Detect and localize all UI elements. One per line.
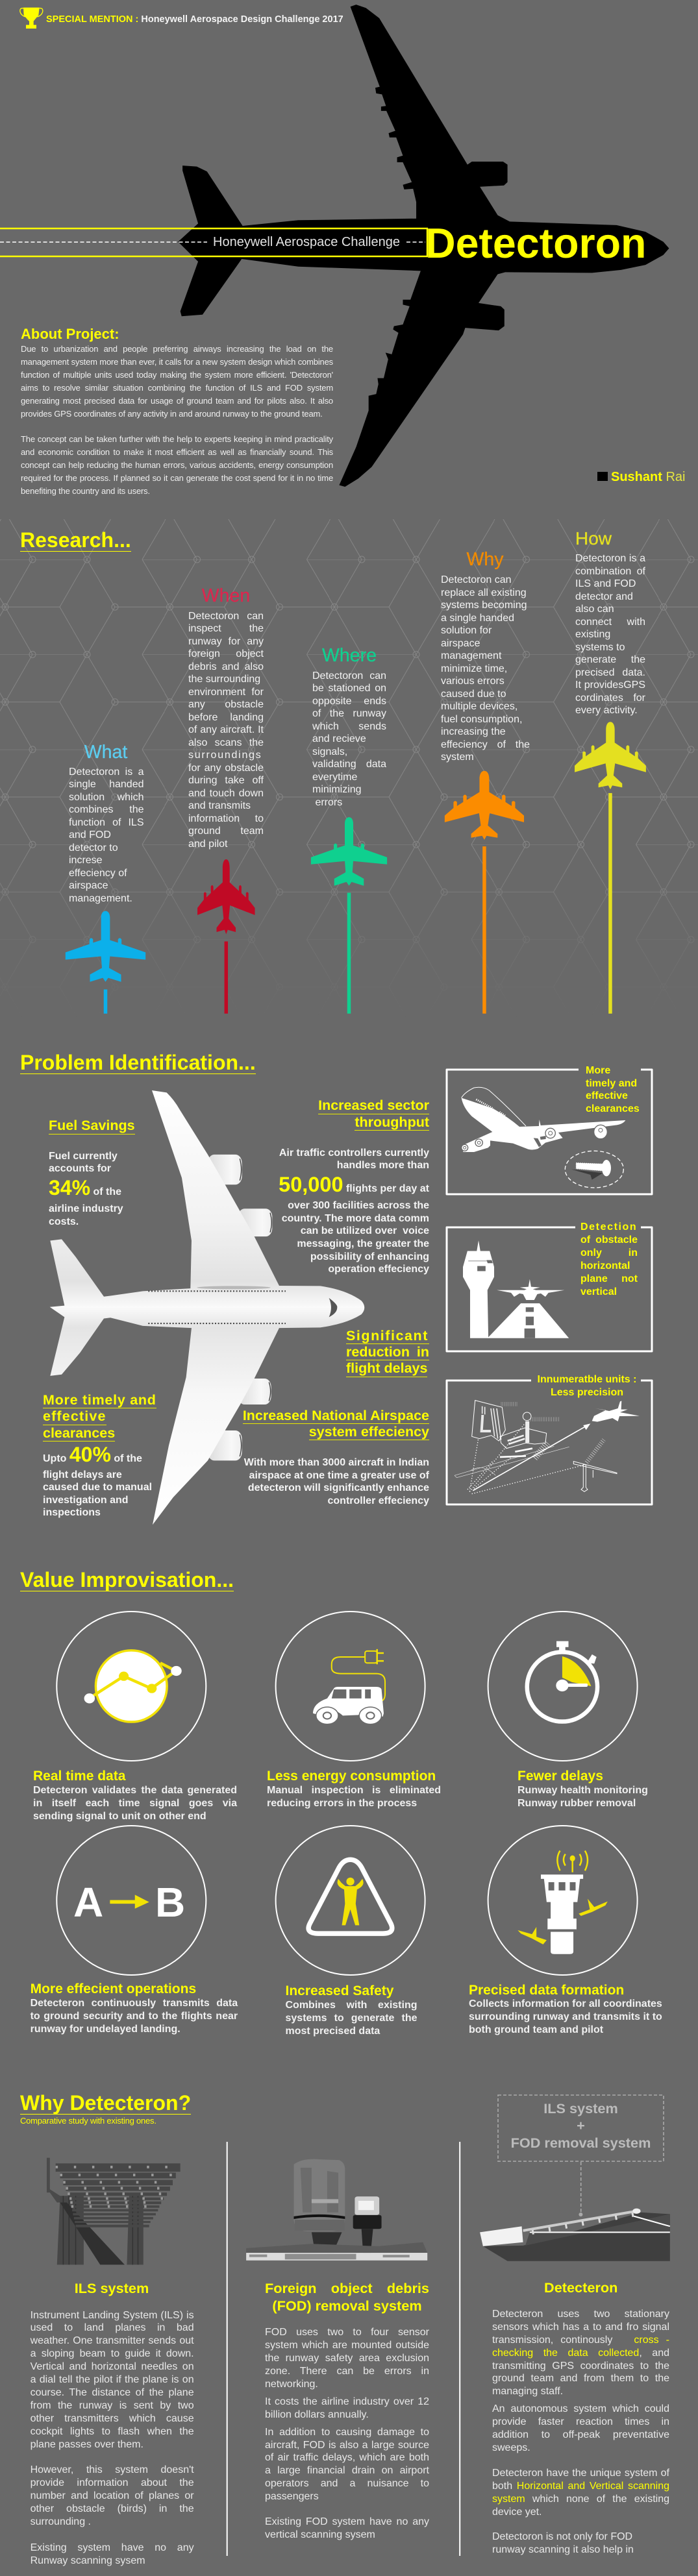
text: how: existing [575,629,610,640]
icon: line chart [84,1650,182,1722]
text: increased safety: Combines with existing [286,2000,417,2011]
text: when: runway for any [188,636,264,647]
text: fewer delays: Runway health monitoring [517,1785,648,1796]
text: Detecteron autonomy: sweeps. [492,2442,530,2453]
icon: blue plane with runway [66,911,145,1014]
text: what [69,766,144,903]
text: when: also scans the [188,737,264,748]
heading: why: Why [466,549,504,570]
text: Detecteron unique system: Detecteron have the unique system of [492,2468,669,2479]
label: clearances box: clearances [586,1103,640,1114]
text: increased safety: most precised data [286,2026,380,2037]
text: ILS system: Runway scanning sysem [31,2555,145,2566]
text: when: of any aircraft. It [188,724,264,735]
text: FOD description: zone. There can be errors in [265,2366,429,2377]
text: when: Detectoron can [188,611,264,622]
text: Detecteron unique system: system which none of the existing [492,2494,669,2505]
text: flight delays: Upto 40% of the [43,1443,142,1466]
heading: fewer delays: Fewer delays [517,1769,603,1784]
text: ILS system: other transmitters which cause [31,2413,194,2424]
divider left [227,2142,228,2556]
text: how: systems to [575,641,625,653]
text: when: and transmits [188,800,251,811]
heading: national airspace: Increased National Airspace [243,1408,429,1423]
text: how: It providesGPS [575,680,645,691]
text: Detecteron unique system: both Horizontal and Vertical scanning [492,2481,669,2492]
text: ILS system: surrounding . [31,2516,91,2527]
heading: fuel savings: Fuel Savings [49,1118,135,1133]
text: Detecteron autonomy [492,2403,669,2453]
circle: data formation [488,1826,638,1975]
author name: Sushant Rai [611,470,685,484]
text: when [188,611,264,850]
heading: about project: About Project: [21,326,119,342]
text: FOD description: the runway safety area exclusion [265,2353,429,2364]
text: what: solution which [69,792,144,802]
text: Detecteron sensors: transmitting GPS coordinates to the [492,2361,669,2372]
text: when: for any obstacle [188,763,264,774]
title: Detectoron [425,220,646,267]
text: sector throughput: can be utilized over voice [301,1225,429,1236]
heading: more timely clearances [43,1392,156,1441]
heading: FOD system: (FOD) removal system [272,2298,422,2313]
text: less energy: Manual inspection is eliminated [267,1785,441,1796]
text: about project: The concept can be taken further with the help to experts keeping in mind practicality [21,434,333,444]
text: efficient operations: to ground security and to the flights near [31,2011,238,2022]
heading: significant reduction: reduction in [346,1344,429,1360]
text: why: caused due to [441,689,506,700]
text: where: be stationed on [312,683,386,694]
heading: less energy: Less energy consumption [267,1769,436,1784]
box: clearances frame [447,1070,652,1194]
text: FOD limitation [265,2516,429,2540]
text: how: precised data. [575,667,645,678]
text: where: opposite ends [312,696,386,707]
subtitle: Comparative study with existing ones. [20,2116,156,2126]
text: FOD description: system which are mounted outside [265,2340,429,2351]
label: innumerable units box: Less precision [551,1387,623,1398]
text: where: and recieve [312,733,366,744]
box: detection frame [447,1227,652,1351]
text: where [312,670,387,808]
text: FOD damage: of air traffic delays, which are both [265,2452,429,2463]
text: how: combination of [575,566,645,576]
text: how: cordinates for [575,692,645,704]
text: sector throughput: 50,000 flights per day at [279,1173,429,1196]
text: fuel savings: Fuel currently [49,1151,118,1162]
text: where: signals, [312,746,347,757]
text: how: also can [575,604,614,615]
circle: safety [276,1826,425,1975]
text: fuel savings: 34% of the [49,1176,121,1199]
text: what: effeciency of [69,867,127,879]
text: when: environment for [188,687,264,698]
text: ILS system: other obstacle (birds) in the [31,2503,194,2514]
icon label: A: A [73,1879,103,1926]
text: sector throughput: Air traffic controllers currently [279,1147,429,1159]
text: Detecteron sensors: checking the data collected, and [492,2348,669,2359]
text: flight delays [43,1443,152,1518]
text: efficient operations [30,1998,238,2035]
text: FOD cost: billion dollars annually. [265,2409,369,2420]
text: flight delays: investigation and [43,1495,129,1506]
subtitle on runway: Honeywell Aerospace Challenge [213,235,400,249]
illustration: Detecteron runway unit [480,2209,670,2261]
text: sector throughput: operation effeciency [328,1264,429,1275]
text: Detecteron sensors: Detecteron uses two stationary [492,2309,669,2320]
text: where: of the runway [312,708,386,719]
label: combined systems [511,2100,651,2151]
text: what: detector to [69,842,118,853]
text: FOD damage: operators and a nuisance to [265,2478,429,2489]
text: fuel savings: accounts for [49,1163,111,1174]
text: FOD description [265,2327,429,2390]
label: clearances box [586,1065,640,1114]
text: real time data: Detecteron validates the data generated [33,1785,237,1796]
text: what: airspace [69,880,108,891]
illustration: FOD sensors [246,2159,427,2261]
award line: SPECIAL MENTION : Honeywell Aerospace Design Challenge 2017 [46,14,343,25]
text: what: increse [69,855,103,866]
text: national airspace: detecteron will significantly enhance [248,1482,429,1493]
text: fuel savings: airline industry [49,1203,123,1214]
text: why: replace all existing [441,587,527,598]
icon: black airplane silhouette [178,5,669,487]
heading: where: Where [322,645,377,666]
text: when: foreign object [188,648,264,659]
heading: why detecteron: Why Detecteron? [20,2091,191,2115]
text: how [575,553,645,716]
text: why: solution for [441,625,492,636]
label: innumerable units box [538,1374,636,1398]
text: how: connect with [575,617,645,627]
label: clearances box: effective [586,1090,628,1101]
heading: significant reduction: flight delays [346,1360,427,1376]
text: sector throughput: messaging, the greater the [297,1238,429,1249]
heading: when: When [202,585,250,606]
heading: more timely clearances: More timely and [43,1392,156,1408]
panel: why detecteron [20,2091,670,2566]
heading: efficient operations: More effecient operations [31,1981,196,1996]
text: when: and touch down [188,788,264,799]
text: FOD limitation: Existing FOD system have no any [265,2516,429,2527]
text: where: errors [315,797,342,808]
icon: red plane with runway [197,859,255,1014]
text: sector throughput: country. The more data comm [282,1213,429,1224]
text: ILS system: provide information about the [31,2477,194,2488]
circle: less energy [276,1612,425,1761]
text: about project: benefiting the country and its users. [21,486,150,496]
text: where: validating data [312,759,386,770]
text: Detecteron sensors [492,2309,669,2397]
text: flight delays: inspections [43,1507,101,1518]
text: about project: concept can help reducing the human errors, various accidents, energy consumption [21,460,333,470]
text: precised data: surrounding runway and transmits it to [469,2011,662,2022]
text: about project: and economic condition to make it most efficient as well as financially sound. This [21,447,333,457]
icon: arrow A to B [110,1895,149,1909]
text: FOD damage: passengers [265,2491,319,2502]
icon: orange plane with runway [445,771,524,1014]
illustration: ILS approach lights [47,2158,181,2264]
text: ILS system: a dial tell the pilot if the plane is on [31,2374,194,2385]
label: detection box [580,1221,638,1297]
divider right [459,2142,460,2556]
text: increased safety: systems to generate the [286,2013,417,2024]
text: flight delays: caused due to manual [43,1482,152,1493]
text: ILS system: Instrument Landing System (ILS) is [31,2309,194,2321]
text: sector throughput: over 300 facilities across the [288,1200,429,1211]
heading: more timely clearances: effective [43,1408,106,1424]
text: precised data: both ground team and pilot [469,2024,603,2035]
label: clearances box: timely and [586,1077,637,1089]
heading: ILS system: ILS system [75,2280,149,2296]
text: why: various errors [441,676,505,687]
text: national airspace [244,1457,429,1506]
label: detection box: plane not [580,1273,638,1284]
text: ILS system: number and location of planes or [31,2490,194,2501]
text: FOD description: networking. [265,2379,318,2390]
text: what: single handed [69,779,144,790]
heading: Detecteron: Detecteron [544,2279,617,2296]
text: FOD description: FOD uses two to four sensor [265,2327,429,2338]
text: ILS system [30,2309,194,2566]
text: why: Detectoron can [441,574,512,585]
text: FOD cost [265,2396,429,2420]
text: real time data: sending signal to unit on other end [33,1811,206,1822]
heading: value improvisation: Value Improvisation... [20,1568,234,1591]
heading: increased safety: Increased Safety [286,1983,393,1998]
heading: more timely clearances: clearances [43,1425,115,1441]
heading: research: Research... [20,528,131,552]
text: Detecteron autonomy: addition to off-peak preventative [492,2429,669,2440]
text: ILS system: However, this system doesn't [31,2464,194,2475]
text: ILS system: weather. One transmitter sends out [31,2335,194,2346]
text: Detecteron unique system [492,2468,669,2518]
text: about project: Due to urbanization and people preferring airways increasing the load on the [21,344,333,354]
text: Detecteron sensors: ground team and from them to the [492,2373,669,2384]
text: about project: provides GPS coordinates of any activity in and around runway to the ground team. [21,409,323,419]
text: efficient operations: Detecteron continuously transmits data [31,1998,238,2009]
text: about project: function of multiple units used today making the system more efficient. 'Detectoron' [21,370,333,380]
heading: increased sector throughput: Increased sector [318,1098,429,1113]
illustration: airport systems network [455,1401,640,1494]
runway lines [0,228,427,256]
text: ILS system: plane passes over them. [31,2439,143,2450]
text: Detecteron autonomy: provide faster reaction times in [492,2416,669,2427]
panel: research [0,519,698,1014]
text: what: Detectoron is a [69,766,144,778]
text: Detecteron sensors: transmission, continously cross - [492,2335,669,2346]
text: Detecteron closing: Detectoron is not only for FOD [492,2531,632,2542]
text: FOD damage [265,2427,429,2502]
label: detection box: horizontal [580,1260,630,1271]
text: sector throughput: handles more than [337,1160,429,1171]
text: why [441,574,530,763]
text: where: Detectoron can [312,670,386,681]
heading: precised data: Precised data formation [469,1983,624,1998]
text: why: systems becoming [441,600,527,611]
heading: significant reduction: Significant [346,1328,429,1343]
text: less energy: reducing errors in the process [267,1798,417,1809]
illustration: tower, plane and runway [463,1240,569,1338]
text: Detecteron unique system: device yet. [492,2507,542,2518]
text: when: information to [188,813,264,824]
text: what: and FOD [69,829,111,840]
icon label: B: B [155,1879,185,1926]
text: when: before landing [188,712,264,723]
icon: trophy [20,8,43,29]
label: innumerable units box: Innumeratble units : [538,1374,636,1385]
text: precised data [469,1998,662,2035]
text: Detecteron sensors: managing staff. [492,2386,563,2397]
label: detection box: vertical [580,1286,617,1297]
heading: what: What [84,742,127,763]
text: how: detector and [575,591,633,602]
text: increased safety [286,2000,417,2037]
heading: real time data: Real time data [33,1769,125,1784]
label: combined systems: + [577,2117,585,2133]
text: why: a single handed [441,613,514,624]
text: why: airspace [441,638,480,649]
text: how: generate the [575,654,645,665]
text: ILS system: cockpit lights to flash when the [31,2426,194,2437]
icon: green plane with runway [311,817,387,1014]
text: about project: management system more than ever, it calls for a new system design which combines [21,357,333,367]
heading: problem identification: Problem Identification... [20,1051,256,1074]
text: where: everytime [312,772,357,783]
heading: increased sector throughput [318,1098,429,1131]
text: FOD damage: a large financial drain on airport [265,2465,429,2476]
text: where: which sends [312,721,386,732]
text: about project [21,344,334,496]
white airplane illustration [50,1090,364,1525]
text: what: combines the [69,804,144,815]
illustration: airliner above debris [462,1087,625,1188]
icon: electric car [313,1649,385,1724]
text: Detecteron closing: runway scanning it also help in [492,2544,634,2555]
text: ILS system: from the runway is sent by two [31,2400,194,2411]
icon: yellow plane with runway [575,722,646,1014]
panel: problem identification [20,1051,653,1525]
text: FOD limitation: vertical scanning sysem [265,2529,375,2540]
label: combined systems: ILS system [543,2100,618,2116]
text: why: fuel consumption, [441,714,522,725]
author marker [597,472,608,481]
text: when: any obstacle [188,699,264,710]
text: ILS system: Existing system have no any [31,2542,194,2553]
icon: safety triangle [308,1859,392,1933]
text: Detecteron autonomy: An autonomous system which could [492,2403,669,2414]
text: about project: required for the process. If planned so it can generate the cost spend for it in no time [21,473,333,483]
label: clearances box: More [586,1065,610,1076]
text: fuel savings: costs. [49,1216,79,1227]
text: ILS system: course. The distance of the plane [31,2387,194,2398]
label: combined systems: FOD removal system [511,2135,651,2151]
text: national airspace: With more than 3000 aircraft in Indian [244,1457,429,1468]
box: innumerable units frame [447,1380,652,1504]
text: about project: aims to resolve similar situation combining the function of ILS and FOD system [21,383,333,393]
heading: national airspace [243,1408,429,1440]
text: precised data: Collects information for all coordinates [469,1998,662,2009]
text: what: function of ILS [69,816,144,828]
dashed box and connector [498,2095,664,2216]
circle: real time data [56,1612,206,1761]
text: Detecteron sensors: sensors which has a to and fro signal [492,2322,669,2333]
text: real time data [33,1785,238,1822]
text: FOD damage: aircraft, FOD is also a large source [265,2439,429,2451]
text: when: inspect the [188,623,264,634]
label: detection box: only in [580,1247,638,1258]
text: when: debris and also [188,661,264,672]
text: when: during take off [188,775,264,786]
text: sector throughput: possibility of enhancing [310,1251,429,1262]
text: when: and pilot [188,839,227,850]
label: detection box: Detection [580,1221,637,1233]
text: why: management [441,650,501,661]
text: how: ILS and FOD [575,578,636,589]
text: less energy [267,1785,441,1809]
text: FOD cost: It costs the airline industry over 12 [265,2396,429,2407]
text: when: the surrounding [188,674,260,685]
text: how: Detectoron is a [575,553,645,564]
label: detection box: of obstacle [580,1234,638,1245]
text: why: increasing the [441,726,506,737]
text: real time data: in itself each time signal goes via [33,1798,237,1809]
heading: FOD system: Foreign object debris [265,2280,429,2296]
text: when: ground team [188,826,264,837]
text: efficient operations: runway for undelayed landing. [31,2024,181,2035]
circle: fewer delays [488,1612,638,1761]
text: about project: generating most precised data for usage of ground team and for pilots also. It also [21,396,333,406]
text: when: surroundings [188,750,262,761]
text: ILS system: used to land planes in bad [31,2322,194,2333]
text: why: multiple devices, [441,701,517,712]
text: flight delays: flight delays are [43,1469,122,1480]
text: how: every activity. [575,705,638,716]
heading: FOD system [265,2280,429,2313]
text: where: minimizing [312,784,362,795]
panel: hero [0,5,685,496]
text: why: minimize time, [441,663,507,674]
icon: stopwatch [527,1641,597,1722]
heading: how: How [575,528,612,548]
heading: significant reduction [346,1328,429,1377]
text: FOD damage: In addition to causing damage to [265,2427,429,2438]
text: national airspace: controller effeciency [327,1495,429,1506]
text: ILS system: a sloping beam to guide it down. [31,2348,194,2359]
text: ILS system: Vertical and horizontal needles on [31,2361,194,2372]
text: fuel savings [49,1151,123,1227]
text: why: system [441,752,474,763]
text: sector throughput [279,1147,429,1275]
heading: increased sector throughput: throughput [355,1114,429,1129]
text: national airspace: airspace at one time a greater use of [249,1470,429,1481]
circle: efficient operations [56,1826,206,1975]
heading: national airspace: system effeciency [309,1424,429,1440]
text: why: effeciency of the [441,739,530,750]
panel: value improvisation [20,1568,662,2037]
icon: control tower with signal [517,1851,608,1954]
text: fewer delays: Runway rubber removal [517,1798,636,1809]
text: what: management. [69,893,132,903]
text: Detecteron closing [492,2531,669,2557]
text: fewer delays [517,1785,648,1809]
